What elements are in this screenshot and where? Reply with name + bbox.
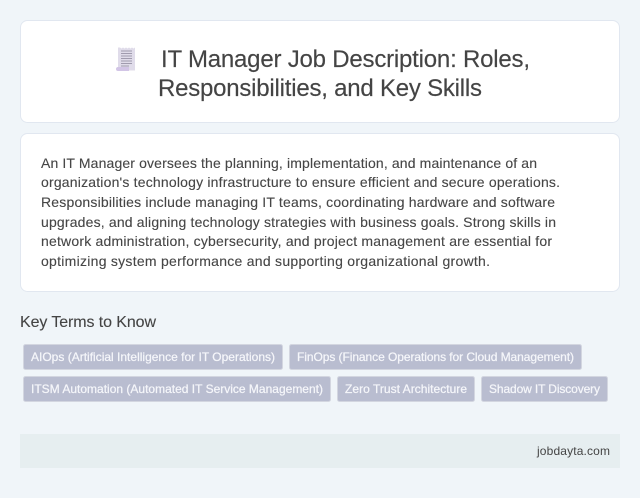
chip: FinOps: FinOps (Finance Operations for Cloud Management) [297,350,574,364]
panel: description card [20,134,620,292]
footer [20,434,620,468]
chip: Zero Trust: Zero Trust Architecture [345,382,467,396]
text block: description: network administration, cybersecurity, and project management are essential for [41,233,552,249]
heading: title: IT Manager Job Description: Roles, [161,46,530,73]
text block: description [41,155,560,269]
text block: description: An IT Manager oversees the planning, implementation, and maintenance of an [41,155,537,171]
text block: description: upgrades, and aligning technology strategies with business goals. Strong skills in [41,214,556,230]
chip: ITSM Automation: ITSM Automation (Automated IT Service Management) [31,382,323,396]
heading: key terms: Key Terms to Know [20,314,156,331]
text block: description: Responsibilities include managing IT teams, coordinating hardware and software [41,194,555,210]
chip: FinOps [290,344,582,370]
chip: Shadow IT [482,376,608,402]
chip: AIOps [24,344,282,370]
heading: title [158,46,530,102]
text block: description: organization's technology infrastructure to ensure efficient and secure operations. [41,174,560,190]
chip: Shadow IT: Shadow IT Discovery [489,382,600,396]
chips: key terms [24,344,608,402]
text block: description: optimizing system performance and supporting organizational growth. [41,253,490,269]
chip: Zero Trust [338,376,474,402]
chip: ITSM Automation [24,376,330,402]
footer: jobdayta.com [536,444,610,458]
chip: AIOps: AIOps (Artificial Intelligence for IT Operations) [31,350,275,364]
heading: title: Responsibilities, and Key Skills [158,75,482,102]
panel: title card [20,20,620,122]
icon: document scroll [116,48,135,71]
